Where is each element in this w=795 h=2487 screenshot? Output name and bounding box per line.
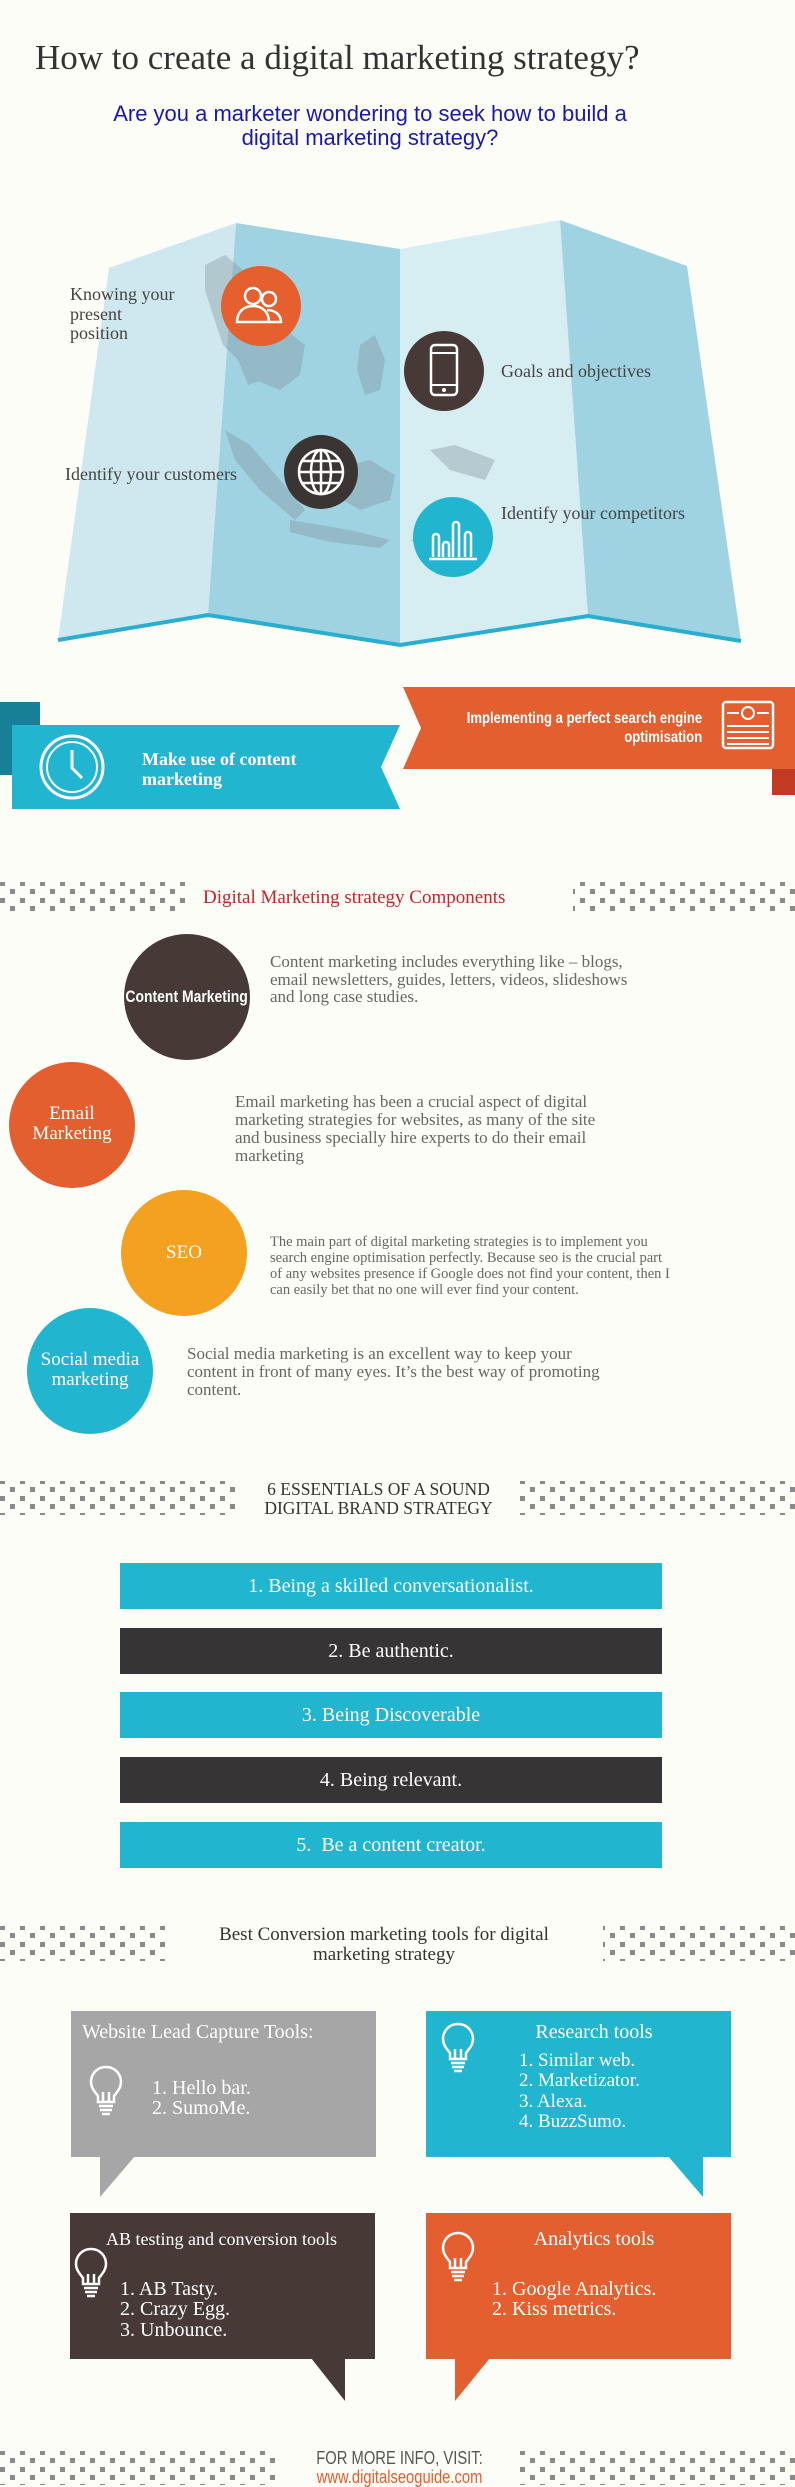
component: social: content.: [187, 1380, 241, 1399]
component: social: marketing: [51, 1369, 129, 1390]
component: seo: of any websites presence if Google does not find your content, then I: [270, 1266, 670, 1282]
title: How to create a digital marketing strategy?: [35, 38, 640, 77]
component: seo: SEO: [166, 1242, 202, 1263]
callout: research: [426, 2011, 731, 2197]
heading: conversion tools: [0, 1924, 795, 1964]
text: competitors: Identify your competitors: [501, 503, 685, 523]
text: customers: Identify your customers: [65, 464, 237, 484]
footer: FOR MORE INFO, VISIT:: [317, 2448, 483, 2468]
bar 4: 4. Being relevant.: [320, 1769, 462, 1791]
map graphic: [58, 220, 742, 647]
text: optimisation: [624, 729, 702, 746]
banner: content marketing: [0, 702, 400, 809]
component: email: and business specially hire experts to do their email: [235, 1128, 586, 1147]
component: social: content in front of many eyes. It’s the best way of promoting: [187, 1362, 600, 1381]
callout: ab testing: 2. Crazy Egg.: [120, 2298, 230, 2320]
text: Make use of content: [142, 749, 296, 769]
component: social: [27, 1308, 600, 1434]
callout: ab testing: [70, 2213, 375, 2401]
component: content marketing: and long case studies.: [270, 987, 418, 1006]
heading: conversion tools: marketing strategy: [313, 1944, 455, 1964]
callout: lead capture: [71, 2011, 376, 2197]
bar 2: [120, 1628, 662, 1674]
component: email: marketing: [235, 1146, 304, 1165]
banner: seo: [403, 687, 795, 795]
text: knowing position: present: [70, 304, 122, 324]
heading: 6 essentials: [0, 1479, 795, 1518]
icon: people (orange): [221, 266, 301, 346]
callout: ab testing: AB testing and conversion tools: [106, 2229, 337, 2249]
callout: analytics: Analytics tools: [534, 2228, 654, 2250]
bar 4: [120, 1757, 662, 1803]
callout: lead capture: Website Lead Capture Tools:: [82, 2021, 314, 2043]
text: [142, 749, 296, 789]
icon: browser money: [722, 700, 774, 750]
heading: components: Digital Marketing strategy Components: [203, 887, 505, 908]
heading: 6 essentials: DIGITAL BRAND STRATEGY: [264, 1498, 493, 1518]
component: email: Email: [49, 1103, 95, 1124]
bar 3: [120, 1692, 662, 1738]
component: email: [9, 1062, 595, 1188]
callout: lead capture: 1. Hello bar.: [152, 2077, 251, 2099]
component: content marketing: Content Marketing: [126, 987, 248, 1006]
text: Implementing a perfect search engine: [466, 710, 702, 727]
text: marketing: [142, 769, 222, 789]
heading: components: [0, 882, 795, 911]
component: email: Marketing: [32, 1123, 112, 1144]
text: knowing position: Knowing your: [70, 284, 174, 304]
component: social: Social media marketing is an excellent way to keep your: [187, 1344, 572, 1363]
component: seo: search engine optimisation perfectly. Because seo is the crucial part: [270, 1250, 662, 1266]
heading: conversion tools: Best Conversion marketing tools for digital: [219, 1924, 549, 1945]
text: [466, 710, 702, 746]
icon: globe: [284, 435, 358, 509]
callout: research: 4. BuzzSumo.: [519, 2111, 626, 2132]
text: knowing position: position: [70, 323, 128, 343]
component: content marketing: Content marketing includes everything like – blogs,: [270, 952, 623, 971]
callout: research: 3. Alexa.: [519, 2091, 587, 2112]
footer: [0, 2448, 795, 2487]
subtitle: [113, 101, 627, 150]
bar 5: 5. Be a content creator.: [296, 1834, 486, 1856]
callout: analytics: 2. Kiss metrics.: [492, 2298, 616, 2320]
component: seo: The main part of digital marketing strategies is to implement you: [270, 1234, 648, 1250]
component: email: marketing strategies for websites, as many of the site: [235, 1110, 595, 1129]
bar 3: 3. Being Discoverable: [302, 1704, 480, 1726]
component: social: Social media: [41, 1349, 139, 1370]
bar 1: [120, 1563, 662, 1609]
callout: ab testing: 3. Unbounce.: [120, 2319, 227, 2341]
callout: research: 2. Marketizator.: [519, 2070, 640, 2091]
callout: analytics: 1. Google Analytics.: [492, 2278, 656, 2300]
component: seo: can easily bet that no one will ever find your content.: [270, 1282, 579, 1298]
callout: research: Research tools: [535, 2021, 653, 2043]
subtitle: Are you a marketer wondering to seek how to build a: [113, 101, 627, 126]
callout: lead capture: 2. SumoMe.: [152, 2097, 250, 2119]
callout: research: 1. Similar web.: [519, 2050, 635, 2071]
callout: analytics: [426, 2213, 731, 2401]
subtitle: digital marketing strategy?: [242, 125, 498, 150]
bar 2: 2. Be authentic.: [328, 1640, 454, 1662]
footer: www.digitalseoguide.com: [317, 2467, 483, 2487]
component: content marketing: [124, 934, 627, 1060]
callout: ab testing: 1. AB Tasty.: [120, 2278, 218, 2300]
component: email: Email marketing has been a crucial aspect of digital: [235, 1092, 587, 1111]
heading: 6 essentials: 6 ESSENTIALS OF A SOUND: [267, 1479, 490, 1499]
component: seo: [121, 1190, 670, 1316]
text: goals: Goals and objectives: [501, 361, 651, 381]
icon: phone: [404, 331, 484, 411]
icon: clock: [40, 734, 104, 800]
bar 1: 1. Being a skilled conversationalist.: [248, 1575, 534, 1597]
icon: bar chart: [413, 497, 493, 577]
text: knowing position: [70, 284, 174, 343]
bar 5: [120, 1822, 662, 1868]
component: content marketing: email newsletters, guides, letters, videos, slideshows: [270, 970, 627, 988]
